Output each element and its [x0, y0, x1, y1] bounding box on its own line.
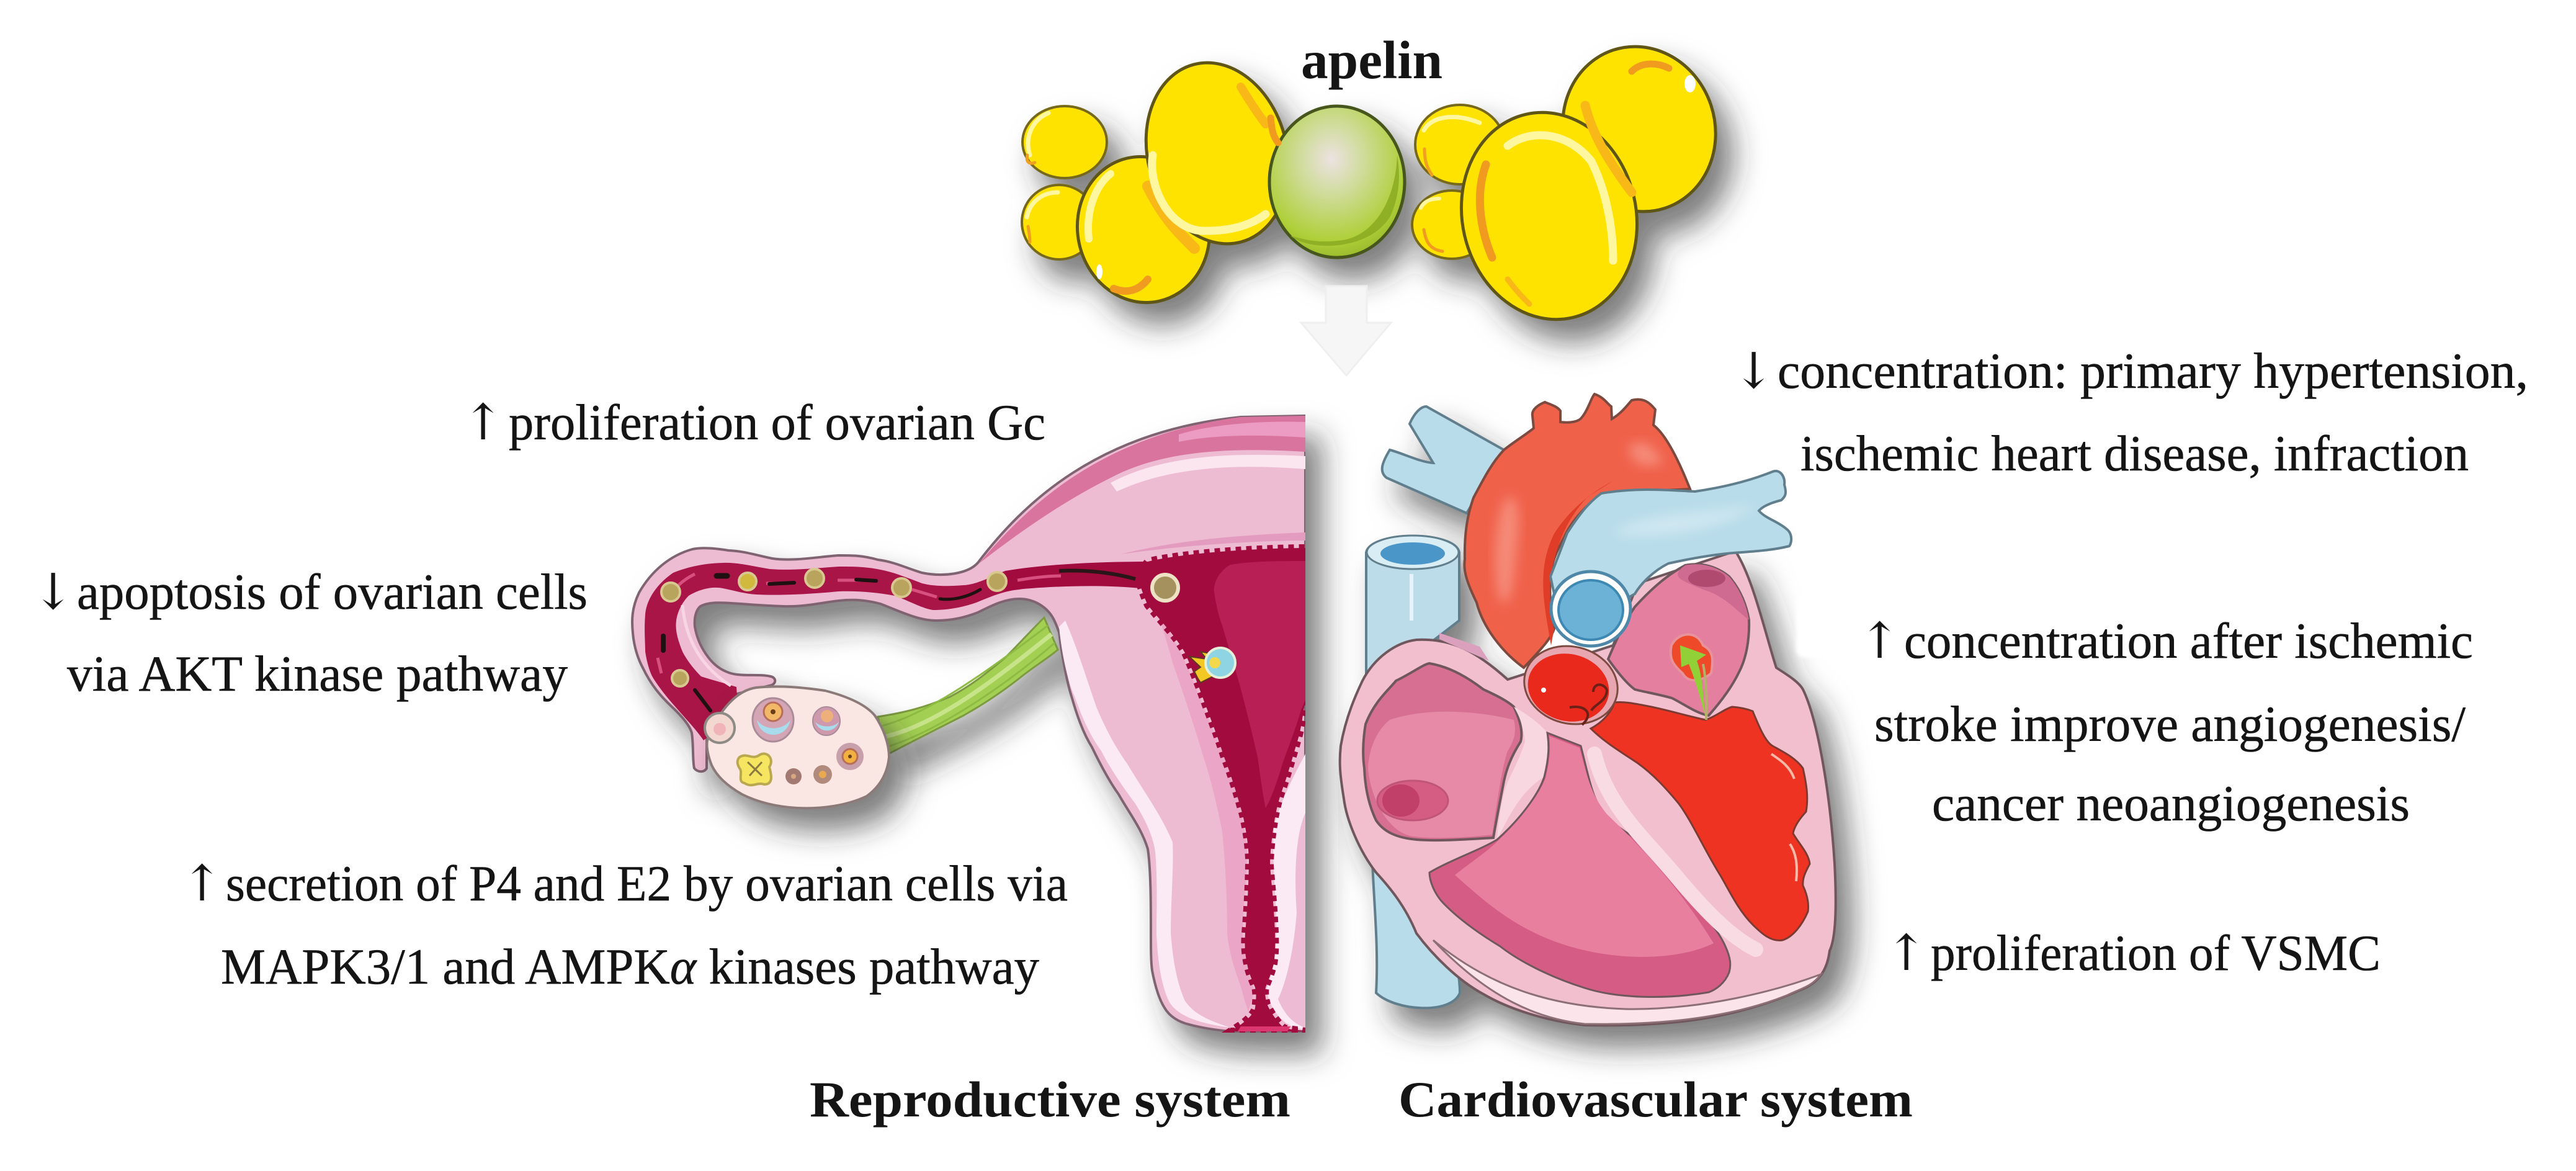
cell: small top left	[1022, 106, 1107, 178]
text block: apoptosis of ovarian cells: ↓	[32, 563, 74, 621]
illustration: reproductive system	[632, 416, 1305, 1031]
text block: decreased concentration	[1733, 342, 2528, 482]
septum between atria	[1497, 707, 1549, 840]
tube lumen	[645, 563, 1080, 740]
text block: apoptosis of ovarian cells	[32, 563, 588, 702]
text block: apoptosis of ovarian cells: via AKT kinase pathway	[67, 645, 568, 702]
white patch beside heart	[1796, 593, 1827, 658]
label: cardiovascular system: Cardiovascular system	[1398, 1071, 1913, 1128]
ovary ligament	[878, 617, 1058, 755]
uterus top band	[979, 416, 1305, 563]
ovary	[705, 686, 889, 808]
uterine wall white strip	[1059, 621, 1230, 1028]
right atrium valve opening	[1377, 781, 1448, 820]
heart body	[1340, 551, 1836, 1025]
left atrium	[1608, 564, 1749, 716]
left pulmonary branches	[1382, 406, 1504, 513]
ligament stripes	[882, 634, 1052, 737]
cell: small bottom left	[1022, 185, 1096, 259]
embryo stages in tube	[661, 569, 1178, 686]
text block: proliferation of VSMC: proliferation of VSMC	[1931, 925, 2381, 981]
label: reproductive system: Reproductive system	[810, 1071, 1290, 1128]
follicles	[705, 698, 864, 785]
aortic valve bulb	[1516, 636, 1626, 734]
text block: proliferation of ovarian Gc: ↑	[462, 393, 504, 451]
text block: increased concentration after stroke: concentration after ischemic	[1904, 612, 2473, 669]
arrow: down arrow	[1301, 286, 1391, 375]
text block: increased concentration after stroke: ↑	[1859, 612, 1900, 670]
cell: large lower left	[1064, 145, 1223, 315]
highlights on yellow cells	[1027, 64, 1696, 304]
title: apelin: apelin	[1301, 30, 1442, 90]
illustration: apelin adipocyte cells	[1022, 27, 1737, 337]
uterine wall pink strip	[1156, 609, 1254, 1012]
cell: large lower right	[1441, 95, 1657, 337]
text block: decreased concentration: concentration: primary hypertension,	[1778, 343, 2528, 399]
cell: small top right	[1415, 105, 1505, 184]
superior vena cava opening	[1367, 536, 1459, 621]
illustration: heart	[1340, 394, 1836, 1025]
text block: proliferation of ovarian Gc: proliferation of ovarian Gc	[509, 394, 1045, 451]
right atrium	[1363, 663, 1521, 840]
tube entering cavity	[1005, 562, 1151, 591]
aorta	[1464, 394, 1690, 668]
text block: increased concentration after stroke: cancer neoangiogenesis	[1932, 775, 2410, 832]
pulmonary trunk	[1550, 471, 1791, 621]
right ventricle	[1429, 733, 1730, 997]
right cervix lobe	[1267, 754, 1305, 1030]
text block: proliferation of VSMC: ↑	[1885, 924, 1927, 982]
text block: secretion of P4 and E2: ↑	[181, 855, 223, 912]
cell: large upper right	[1542, 27, 1737, 231]
text block: secretion of P4 and E2: secretion of P4 and E2 by ovarian cells via	[226, 855, 1068, 912]
pale lower wall	[1433, 940, 1821, 1024]
text block: secretion of P4 and E2: MAPK3/1 and AMPKα kinases pathway	[221, 938, 1039, 995]
mitral valve with green arrow	[1671, 634, 1712, 720]
green cell lower rim	[1290, 155, 1399, 246]
sperm in tube	[663, 576, 980, 711]
pulmonary ring	[1551, 572, 1630, 646]
text block: decreased concentration: ↓	[1733, 342, 1774, 400]
septum highlight	[1594, 754, 1756, 949]
text block: increased concentration after stroke	[1859, 612, 2473, 832]
text block: decreased concentration: ischemic heart disease, infraction	[1800, 425, 2469, 482]
inferior vena cava	[1372, 863, 1460, 1008]
superior vena cava	[1366, 536, 1459, 681]
cell: green apelin cell	[1269, 106, 1405, 258]
uterine cavity	[1137, 548, 1305, 1031]
implanting blastocyst	[1189, 648, 1235, 683]
left ventricle	[1591, 702, 1810, 940]
cell: large upper left	[1127, 47, 1308, 260]
text block: secretion of P4 and E2	[181, 855, 1068, 995]
uterus body and fallopian tube	[632, 416, 1305, 1031]
text block: apoptosis of ovarian cells: apoptosis of ovarian cells	[77, 563, 588, 620]
text block: increased concentration after stroke: stroke improve angiogenesis/	[1874, 696, 2466, 752]
cell: small bottom right	[1412, 191, 1491, 259]
